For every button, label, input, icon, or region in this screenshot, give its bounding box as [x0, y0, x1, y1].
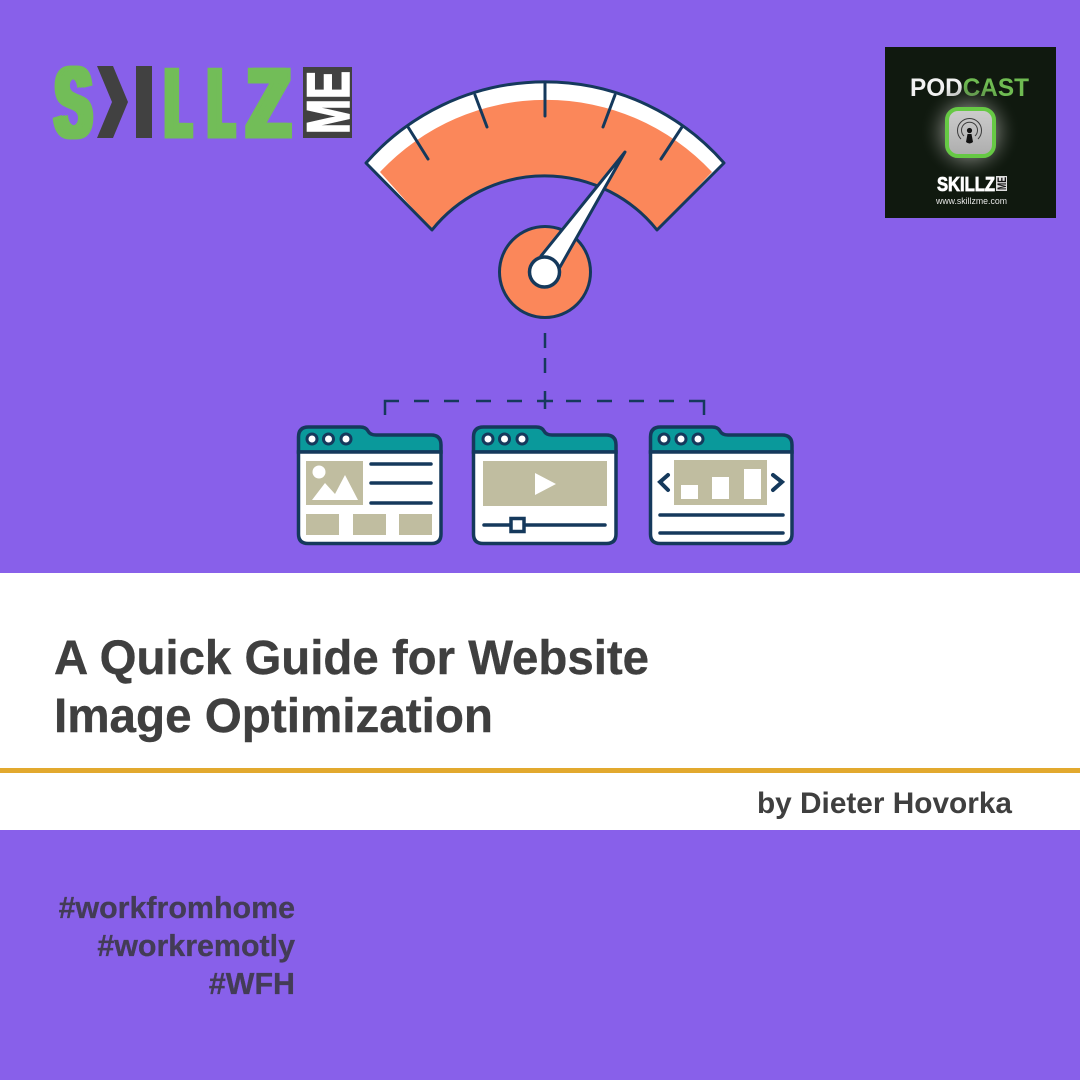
logo: SKILLZ ME: Z	[245, 49, 287, 157]
logo: SKILLZ ME: S	[52, 48, 89, 159]
logo: SKILLZ ME: Z	[250, 49, 292, 157]
logo: SKILLZ ME: S	[58, 48, 95, 159]
browser window: image and text	[298, 427, 441, 544]
logo: SKILLZ ME: L	[163, 51, 186, 157]
podcast url: www.skillzme.com	[935, 196, 1007, 206]
gauge hub	[500, 226, 590, 318]
logo: SKILLZ ME: L	[170, 51, 193, 157]
gauge needle pivot	[530, 257, 560, 287]
logo: SKILLZ ME: ME	[295, 71, 362, 134]
gauge outline	[366, 82, 724, 230]
gauge orange dial	[380, 100, 712, 230]
podcast heading: PODCAST	[910, 74, 1029, 102]
title: Image Optimization	[54, 690, 493, 743]
podcast badge	[885, 47, 1056, 218]
title: A Quick Guide for Website	[54, 632, 649, 685]
dashed connector	[385, 333, 704, 415]
hashtags: #workremotly	[97, 929, 295, 963]
hashtags: #WFH	[209, 967, 295, 1001]
gauge needle	[541, 152, 625, 267]
podcast mini logo: SKILLZ	[937, 174, 995, 196]
gauge white band	[366, 82, 724, 230]
logo: SKILLZ ME	[52, 48, 362, 159]
logo: SKILLZ ME: L	[206, 51, 229, 157]
hashtags: #workfromhome	[59, 891, 295, 925]
podcast icon	[947, 109, 994, 156]
podcast mini logo: ME	[995, 177, 1009, 190]
podcast glow	[920, 82, 1020, 182]
gauge ticks	[408, 82, 682, 159]
browser window: bar chart slider	[650, 427, 792, 544]
browser window: video	[474, 427, 616, 544]
logo: SKILLZ ME: L	[213, 51, 236, 157]
white title band	[0, 573, 1080, 830]
gold divider	[0, 768, 1080, 773]
logo: SKILLZ ME: S	[55, 48, 92, 159]
gauge	[366, 82, 724, 318]
author: by Dieter Hovorka	[757, 787, 1012, 820]
